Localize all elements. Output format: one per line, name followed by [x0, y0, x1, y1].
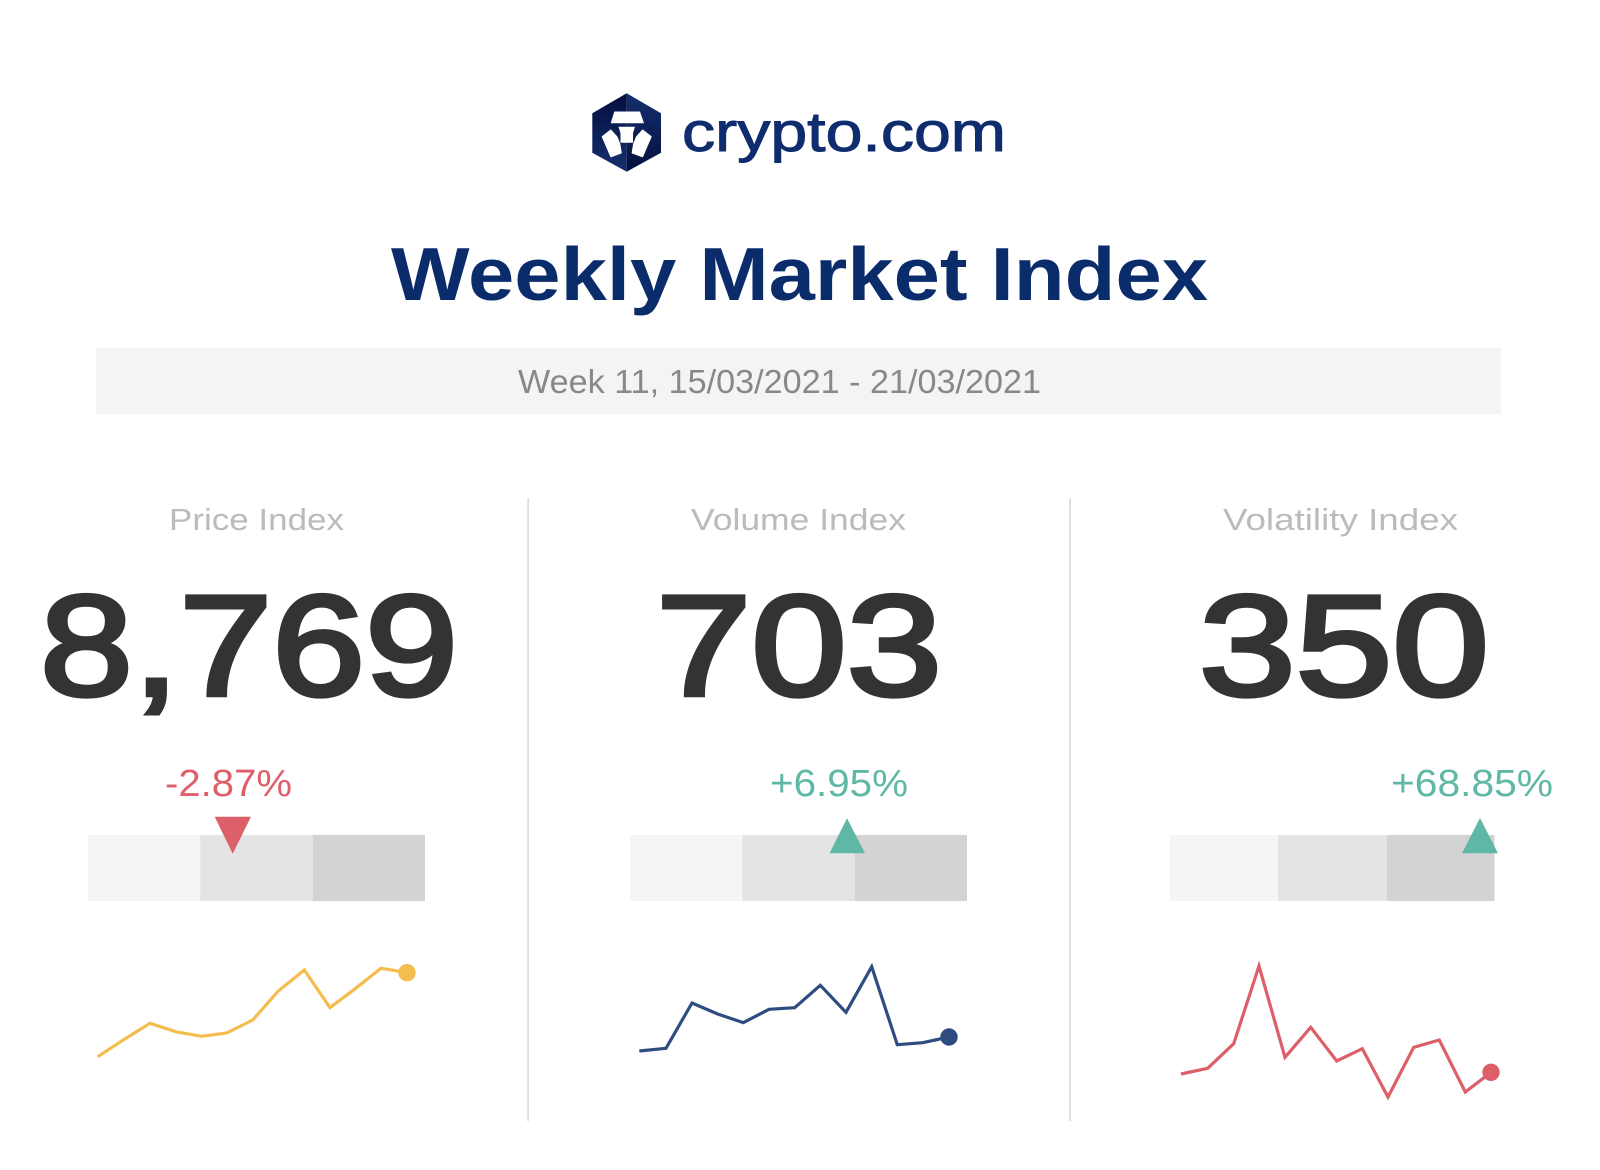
marker: up triangle — [1462, 818, 1498, 853]
logo wordmark: crypto.com — [682, 100, 1006, 163]
change: +6.95%: +6.95% — [770, 763, 908, 805]
value: 8,769: 8,769 — [40, 567, 458, 726]
sparkline: volume — [639, 967, 958, 1051]
change: -2.87%: -2.87% — [165, 763, 292, 805]
logo: crypto.com — [592, 93, 1006, 172]
range bar — [88, 835, 425, 901]
heading: volatility index: Volatility Index — [1223, 502, 1459, 537]
marker: down triangle — [215, 817, 251, 854]
heading: volume index: Volume Index — [691, 502, 907, 537]
icon: lion hexagon — [592, 93, 661, 172]
change: +68.85%: +68.85% — [1391, 763, 1553, 805]
sparkline: volatility — [1181, 966, 1500, 1097]
sparkline: price — [98, 964, 416, 1057]
date range text: Week 11, 15/03/2021 - 21/03/2021 — [518, 363, 1041, 400]
panel: price index — [40, 502, 458, 1057]
title: Weekly Market Index — [391, 232, 1208, 316]
value: 350: 350 — [1199, 567, 1489, 726]
panel: volume index — [630, 502, 967, 1051]
heading: price index: Price Index — [169, 502, 345, 537]
value: 703: 703 — [656, 567, 942, 726]
marker: up triangle — [830, 818, 865, 853]
panel: volatility index — [1170, 502, 1553, 1097]
range bar — [630, 835, 967, 901]
range bar — [1170, 835, 1494, 901]
date banner — [96, 348, 1501, 414]
